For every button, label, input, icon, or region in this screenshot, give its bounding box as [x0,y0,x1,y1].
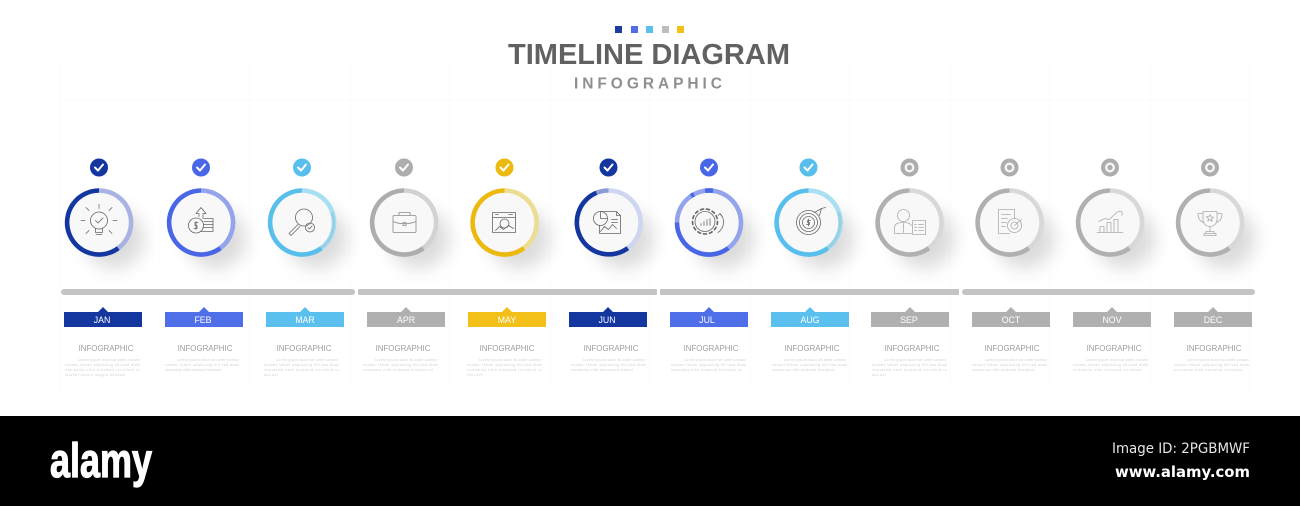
month tag: OCT [1002,315,1021,325]
description: Lorem ipsum dolor sit amet consec [985,358,1047,362]
description: nonummy nibh euismod tincidunt ut [872,368,947,372]
description: consec tetuer adipiscing elit sed diam [363,363,438,367]
title: TIMELINE DIAGRAM [508,39,790,71]
legend colour squares [615,26,684,33]
description: nonummy nibh euismod tincidunt [571,368,633,372]
month tag [569,307,647,327]
description: Lorem ipsum dolor sit amet consec [479,358,541,362]
description: consec tetuer adipiscing elit sed diam [467,363,542,367]
ring with browser chart icon [473,190,550,268]
description: nonummy nibh euismod tincidunt ut [467,368,542,372]
month tag: JAN [94,315,110,325]
description: nonummy nibh euismod tincidunt ut [65,368,140,372]
description: INFOGRAPHIC [79,344,134,353]
description: nonummy nibh euismod tincidunt [1174,368,1242,372]
ring with trophy icon [1178,190,1255,268]
month tag [367,307,445,327]
ring with magnifier icon [270,190,347,268]
description [363,344,438,372]
month tag [771,307,849,327]
description: consec tetuer adipiscing elit sed diam [872,363,947,367]
description: INFOGRAPHIC [985,344,1040,353]
month tag [972,307,1050,327]
description: INFOGRAPHIC [684,344,739,353]
month tag [64,307,142,327]
footer band [0,416,1300,506]
alamy logo: alamy [50,435,152,488]
column: FEB [165,158,246,372]
ring with growth chart icon [1078,190,1155,268]
description: INFOGRAPHIC [785,344,840,353]
description: Lorem ipsum dolor sit amet consec [684,358,746,362]
month tag: NOV [1102,315,1122,325]
description: Lorem ipsum dolor sit amet consec [784,358,846,362]
month tag [165,307,243,327]
description: consec tetuer adipiscing elit sed diam [264,363,339,367]
month tag: DEC [1204,315,1223,325]
month tag [670,307,748,327]
ring with checklist target icon [978,190,1054,268]
description: INFOGRAPHIC [885,344,940,353]
description: consec tetuer adipiscing elit sed diam [1174,363,1249,367]
description: INFOGRAPHIC [584,344,639,353]
column: JAN [64,158,144,377]
column: NOV [1073,158,1155,372]
status check [192,158,210,176]
description: nonummy nibh euismod tincidunt ut [264,368,339,372]
description: INFOGRAPHIC [277,344,332,353]
description: laoreet [872,373,886,377]
description [1073,344,1148,372]
month tag [871,307,949,327]
description: consec tetuer adipiscing elit sed diam [671,363,746,367]
ring with briefcase icon [372,190,449,268]
status check [800,158,818,176]
description: laoreet [467,373,483,377]
status check [600,158,618,176]
description: consec tetuer adipiscing elit sed diam [165,363,239,367]
description [165,344,239,372]
timeline segmented bar [61,289,1255,295]
status check [395,158,413,176]
ring with dollar target icon [777,190,854,268]
description: nonummy nibh euismod tincidunt ut [671,368,741,372]
column: DEC [1174,158,1255,372]
description: INFOGRAPHIC [1087,344,1142,353]
description [872,344,947,377]
description: Lorem ipsum dolor sit amet consec [177,358,239,362]
description: Lorem ipsum dolor sit amet consec [1086,358,1148,362]
month tag: APR [397,315,415,325]
month tag: JUN [598,315,616,325]
subtitle: INFOGRAPHIC [574,76,722,92]
month tag: MAR [295,315,315,325]
month tag: AUG [800,315,820,325]
status check [700,158,718,176]
description [671,344,746,372]
status check [293,158,311,176]
description [65,344,140,377]
column: JUN [569,158,654,372]
month tag: SEP [900,315,918,325]
column: AUG [771,158,854,372]
column: MAR [264,158,347,377]
description: INFOGRAPHIC [376,344,431,353]
column: MAY [467,158,550,377]
status pending [900,158,918,176]
status check [90,158,108,176]
description: INFOGRAPHIC [480,344,535,353]
description [972,344,1047,372]
description: laoreet [264,373,278,377]
ring with gear chart icon [677,190,754,268]
column: SEP [871,158,954,377]
description: consec tetuer adipiscing elit sed diam [1073,363,1148,367]
description: Lorem ipsum dolor sit amet consec [1187,358,1249,362]
month tag [468,307,546,327]
description [467,344,542,377]
description: consec tetuer adipiscing elit sed diam [65,363,140,367]
month tag: FEB [194,315,212,325]
description: INFOGRAPHIC [178,344,233,353]
description: consec tetuer adipiscing elit sed diam [772,363,847,367]
image id: Image ID: 2PGBMWF [1112,441,1250,457]
description: Lorem ipsum dolor sit amet consec [884,358,946,362]
description: Lorem ipsum dolor sit amet consec [78,358,140,362]
description: consec tetuer adipiscing elit sed diam [571,363,646,367]
ring with person checklist icon [878,190,954,268]
ring with report icon [577,190,654,268]
description [1174,344,1249,372]
status pending [1000,158,1018,176]
description [772,344,847,372]
month tag [1174,307,1252,327]
status pending [1101,158,1119,176]
description: nonummy nibh euismod tincidunt [165,368,221,372]
description: Lorem ipsum dolor sit amet consec [583,358,645,362]
description: Lorem ipsum dolor sit amet consec [375,358,437,362]
month tag [1073,307,1151,327]
column: APR [363,158,449,372]
description: laoreet dolore magna aliquam [65,373,125,377]
description: nonummy nibh euismod tincidunt [972,368,1034,372]
ring with coins icon [169,190,246,268]
month tag: MAY [498,315,516,325]
status check [496,158,514,176]
description: consec tetuer adipiscing elit sed diam [972,363,1047,367]
status pending [1201,158,1219,176]
description: nonummy nibh euismod tincidunt [1073,368,1141,372]
description [264,344,339,377]
month tag [266,307,344,327]
description [571,344,646,372]
ring with lightbulb icon [67,190,144,268]
website: www.alamy.com [1115,463,1250,481]
description: INFOGRAPHIC [1187,344,1242,353]
description: nonummy nibh euismod tincidunt ut [363,368,433,372]
description: nonummy nibh euismod tincidunt [772,368,834,372]
month tag: JUL [699,315,715,325]
description: Lorem ipsum dolor sit amet consec [276,358,338,362]
column: JUL [670,158,754,372]
column: OCT [972,158,1054,372]
